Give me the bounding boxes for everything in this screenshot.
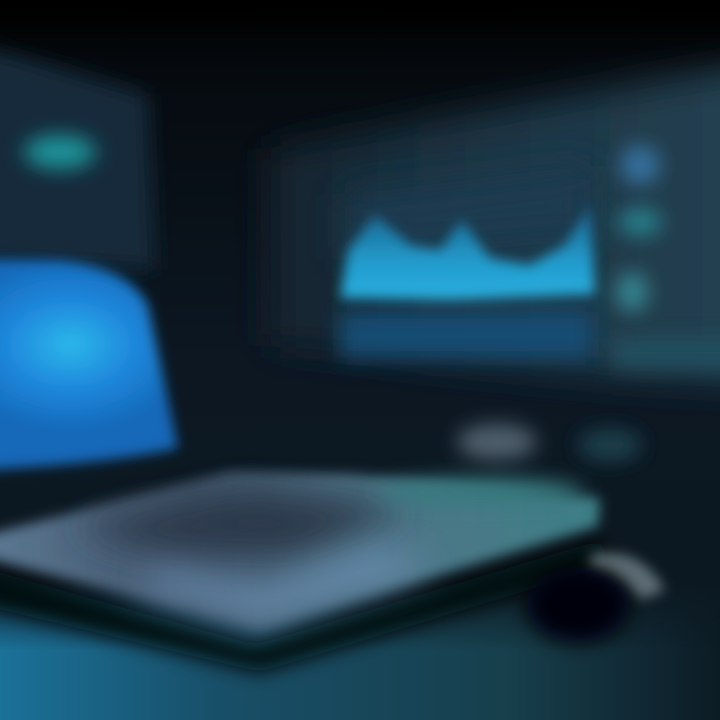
mouse light rim: [590, 553, 665, 600]
mouse dark body: [526, 567, 630, 643]
left monitor teal blob: [24, 135, 96, 169]
sidebar indicator pale teal: [616, 272, 648, 312]
left monitor glowing screen: [0, 258, 178, 472]
sidebar lower strip: [612, 338, 720, 368]
chart upper shading: [345, 165, 590, 260]
lower data strip: [340, 312, 592, 358]
top vignette: [0, 0, 720, 30]
sidebar indicator blue: [620, 145, 660, 185]
keyboard body: [0, 472, 600, 630]
panel: mouse: [526, 553, 665, 643]
right monitor frame: [268, 55, 720, 385]
panel: right monitor: [268, 55, 720, 385]
desk surface bottom glow: [0, 580, 720, 720]
keyboard shadow: [0, 540, 610, 672]
area chart: [340, 205, 595, 300]
left monitor frame: [0, 25, 155, 270]
teal desk glare: [578, 429, 642, 461]
keyboard dark key area: [70, 490, 410, 555]
small device on desk: [457, 424, 537, 460]
panel: left monitor: [0, 25, 178, 472]
panel: keyboard: [0, 472, 610, 672]
sidebar indicator teal: [618, 208, 662, 236]
keyboard light edge: [130, 548, 430, 620]
keyboard teal top: [375, 478, 585, 506]
